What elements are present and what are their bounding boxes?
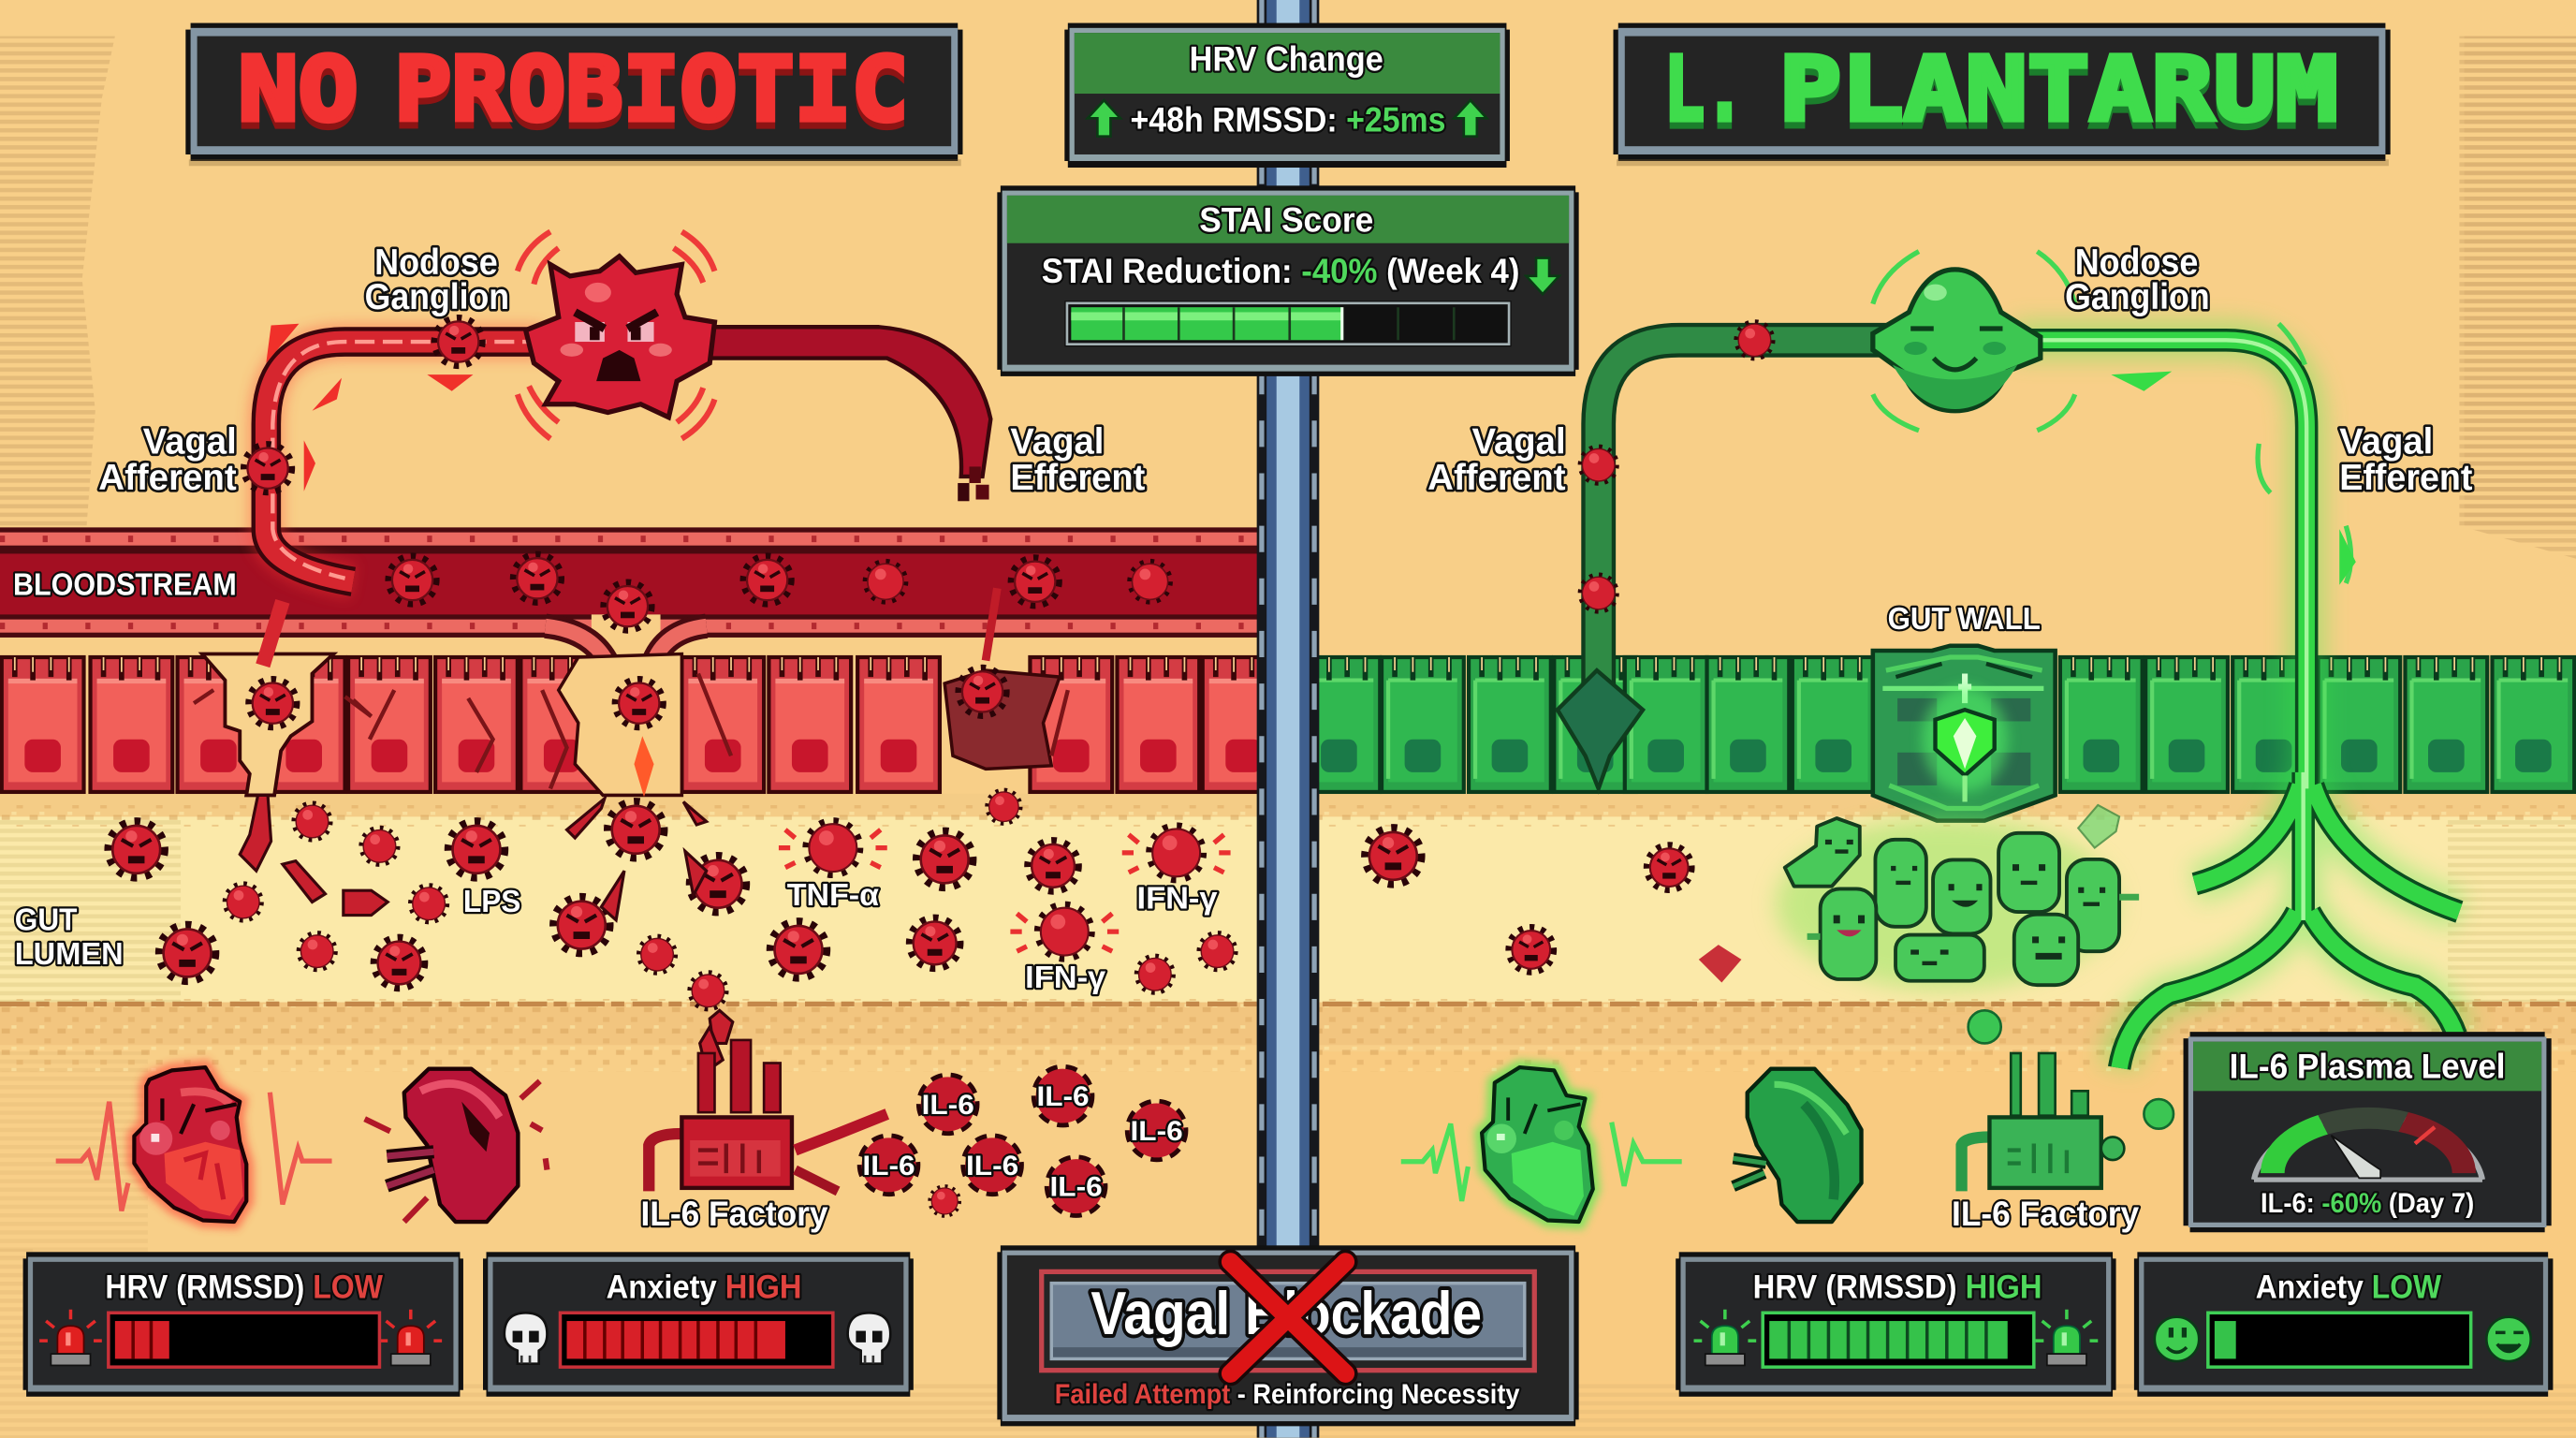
right IL-6 factory bbox=[1962, 1053, 2124, 1191]
left efferent nerve bbox=[698, 327, 990, 501]
bloodstream label: BLOODSTREAM bbox=[13, 567, 237, 602]
stat panel: HRV high bbox=[1676, 1252, 2116, 1397]
meter: low anxiety bbox=[2208, 1313, 2471, 1367]
germs crossing gut wall bbox=[250, 668, 1005, 726]
lumen labels: IFN-γ bbox=[1025, 961, 1106, 995]
right healthy gut wall bbox=[1298, 657, 2574, 792]
left IL-6 factory bbox=[649, 1040, 887, 1191]
stat panel: anxiety high bbox=[483, 1252, 914, 1397]
panel: HRV change bbox=[1064, 23, 1510, 168]
lumen edge stripes bbox=[0, 816, 2576, 1003]
title: no probiotic: NO bbox=[238, 38, 359, 141]
labels: right nerve bbox=[1427, 242, 2473, 498]
pulse arcs: left ganglion bbox=[518, 231, 714, 439]
spine: central divider bbox=[1257, 0, 1319, 1438]
green sparks bbox=[2111, 372, 2356, 585]
title: l. plantarum: L. bbox=[1664, 38, 1745, 141]
panel: STAI score: STAI Reduction: -40% (Week 4) bbox=[1042, 252, 1519, 290]
labels: left nerve: Vagal bbox=[143, 421, 237, 462]
torn blood vessel streak bbox=[986, 588, 997, 661]
right heart with ECG bbox=[1401, 1067, 1682, 1222]
icon: down arrow bbox=[1526, 258, 1559, 294]
labels: right nerve: Efferent bbox=[2339, 458, 2473, 498]
stat panel: HRV high: HRV (RMSSD) HIGH bbox=[1753, 1269, 2042, 1305]
IL-6 blobs: IL-6 bbox=[966, 1151, 1018, 1181]
labels: left nerve bbox=[98, 242, 1145, 498]
right kidney bbox=[1734, 1069, 1862, 1222]
gauge bbox=[2254, 1108, 2482, 1180]
torn nerve fragment bbox=[263, 601, 283, 666]
panel: IL-6 plasma level: IL-6: -60% (Day 7) bbox=[2261, 1188, 2474, 1219]
gut lumen band: left bbox=[0, 816, 1258, 1003]
lumen labels: TNF-α bbox=[787, 878, 879, 913]
sand above lumen bbox=[0, 794, 2576, 816]
labels: left nerve: Afferent bbox=[98, 458, 237, 498]
lumen floor speckle bbox=[0, 999, 2576, 1071]
panel: vagal blockade bbox=[997, 1245, 1579, 1426]
panel: vagal blockade: Vagal Blockade bbox=[1090, 1279, 1482, 1347]
lumen labels: GUT bbox=[15, 902, 77, 937]
IL-6 blobs bbox=[860, 1067, 1185, 1215]
background tint lower right bbox=[1319, 1051, 2576, 1438]
gut wall shield bbox=[1873, 646, 2056, 821]
panel: HRV change: HRV Change bbox=[1190, 39, 1383, 78]
labels: right nerve: Nodose bbox=[2075, 242, 2198, 283]
gut lumen band: right bbox=[1319, 816, 2576, 1003]
germs in right lumen bbox=[1366, 829, 1741, 983]
icon: up arrow left bbox=[1088, 100, 1120, 137]
title: no probiotic bbox=[185, 23, 962, 166]
labels: left nerve: Vagal bbox=[1010, 421, 1104, 462]
icon: alarm bbox=[2036, 1310, 2098, 1365]
panel: IL-6 plasma level bbox=[2184, 1032, 2552, 1232]
labels: right nerve: Ganglion bbox=[2065, 277, 2210, 317]
probiotic bacteria cluster bbox=[1776, 805, 2139, 990]
left kidney bbox=[365, 1069, 547, 1222]
progress bar bbox=[1064, 301, 1512, 346]
labels: right nerve: Afferent bbox=[1427, 458, 1566, 498]
IL-6 blobs: IL-6 bbox=[1036, 1081, 1090, 1112]
germs on right nerve bbox=[1581, 322, 1773, 611]
icon: up arrow right bbox=[1454, 100, 1486, 137]
left afferent nerve bbox=[266, 342, 542, 581]
germs in left lumen bbox=[110, 790, 1236, 1008]
labels: left nerve: Nodose bbox=[374, 242, 498, 283]
title: l. plantarum: PLANTARUM bbox=[1779, 38, 2338, 141]
left damaged gut wall bbox=[2, 654, 1284, 797]
panel: STAI score: STAI Score bbox=[1199, 200, 1373, 239]
labels: right nerve: Vagal bbox=[1472, 421, 1566, 462]
meter: high HRV bbox=[1763, 1313, 2034, 1367]
labels: left nerve: Efferent bbox=[1010, 458, 1145, 498]
lumen labels bbox=[15, 878, 1218, 995]
title: no probiotic: PROBIOTIC bbox=[394, 38, 909, 141]
panel: IL-6 plasma level: IL-6 Plasma Level bbox=[2230, 1047, 2506, 1085]
right efferent nerve with branches bbox=[2012, 340, 2459, 1068]
labels: right nerve: Vagal bbox=[2339, 421, 2433, 462]
icon: skull bbox=[848, 1313, 890, 1364]
panel: HRV change: +48h RMSSD: +25ms bbox=[1131, 100, 1445, 139]
icon: red X bbox=[1231, 1262, 1345, 1373]
sand speckle above lumen bbox=[0, 805, 2576, 827]
pulse arcs: right ganglion bbox=[1873, 252, 2351, 583]
smiling nodose ganglion bbox=[1873, 270, 2041, 411]
icon: alarm bbox=[1694, 1310, 1756, 1365]
IL-6 blobs: IL-6 bbox=[1131, 1116, 1183, 1147]
left bloodstream vessel bbox=[0, 527, 1258, 666]
right afferent diamond ending bbox=[1558, 670, 1643, 788]
lumen labels: LPS bbox=[463, 885, 520, 919]
stat panel: anxiety low bbox=[2134, 1252, 2553, 1397]
angry nodose ganglion bbox=[526, 257, 714, 418]
icon: alarm bbox=[379, 1310, 442, 1365]
IL-6 blobs: IL-6 bbox=[862, 1151, 915, 1181]
gut wall label: GUT WALL bbox=[1888, 602, 2041, 637]
title: l. plantarum bbox=[1614, 23, 2391, 166]
panel: STAI score bbox=[997, 185, 1579, 376]
cell debris bbox=[240, 795, 733, 1071]
meter: low HRV bbox=[109, 1313, 379, 1367]
germs on left nerve bbox=[244, 318, 481, 492]
stat panel: HRV low bbox=[23, 1252, 463, 1397]
stat panel: HRV low: HRV (RMSSD) LOW bbox=[105, 1269, 384, 1305]
icon: smiley bbox=[2486, 1317, 2531, 1361]
panel: vagal blockade: Failed Attempt - Reinforcing Necessity bbox=[1055, 1379, 1520, 1410]
sparking cytokines bbox=[779, 822, 1231, 958]
icon: smiley bbox=[2155, 1317, 2199, 1361]
icon: alarm bbox=[39, 1310, 102, 1365]
left heart with ECG bbox=[56, 1067, 332, 1222]
right afferent nerve bbox=[1599, 340, 1889, 687]
label: left factory: IL-6 Factory bbox=[640, 1195, 828, 1233]
icon: skull bbox=[505, 1313, 547, 1364]
stat panel: anxiety high: Anxiety HIGH bbox=[607, 1269, 801, 1305]
germs in bloodstream bbox=[389, 555, 1170, 629]
lumen labels: IFN-γ bbox=[1137, 882, 1218, 917]
meter: high anxiety bbox=[560, 1313, 833, 1367]
IL-6 blobs: IL-6 bbox=[1050, 1172, 1103, 1203]
lumen labels: LUMEN bbox=[15, 937, 124, 972]
red sparks bbox=[266, 324, 473, 492]
label: right factory: IL-6 Factory bbox=[1952, 1195, 2140, 1233]
stat panel: anxiety low: Anxiety LOW bbox=[2256, 1269, 2442, 1305]
labels: left nerve: Ganglion bbox=[365, 277, 509, 317]
IL-6 blobs: IL-6 bbox=[922, 1090, 974, 1121]
green particles bbox=[1969, 1010, 2174, 1129]
